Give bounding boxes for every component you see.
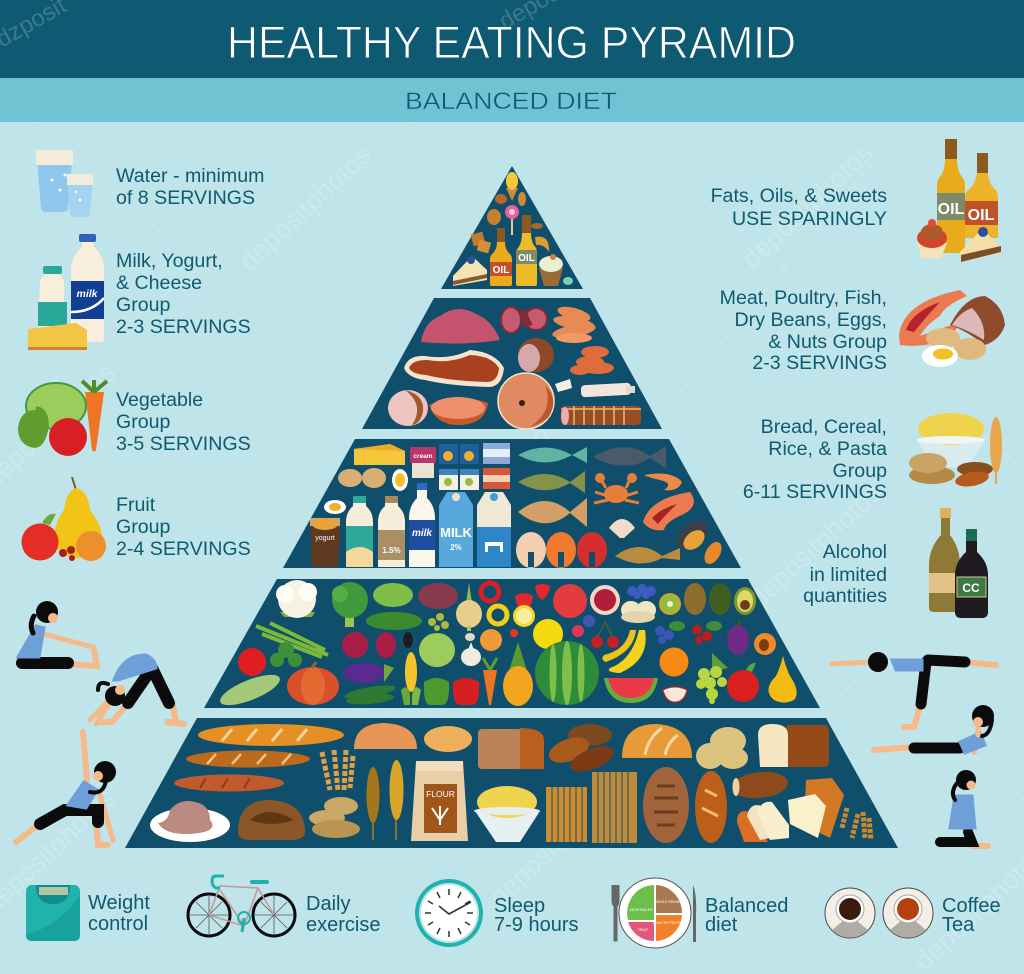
icon: milk bottle, yogurt and cheese: milk: [76, 288, 99, 300]
scallop shell: [609, 519, 635, 538]
flour bag: [411, 761, 468, 841]
pyramid tier 1: fats, oils and sweets: [441, 166, 583, 289]
yellow pear: [768, 656, 797, 702]
text: water: Water - minimum: [116, 165, 264, 187]
raspberry: [572, 625, 584, 637]
oil bottle right: OIL: [518, 253, 535, 264]
bun left: [354, 723, 417, 749]
text: bread group: Group: [833, 460, 887, 482]
bottle: 1.5 percent: [378, 496, 405, 567]
yoga figure: seated forward stretch: [18, 601, 97, 666]
short spaghetti bundle: [546, 787, 587, 842]
watermelon: [535, 641, 599, 705]
text: fats: USE SPARINGLY: [732, 208, 887, 230]
ice cream cone: [506, 172, 518, 201]
green fish: [518, 471, 585, 493]
milk group: text and icon: [28, 234, 251, 350]
text: alcohol: Alcohol: [823, 541, 887, 563]
label: sleep: 7-9 hours: [494, 914, 578, 936]
tan fish: [518, 498, 587, 527]
cucumber zucchini: [217, 669, 283, 711]
icon: wine and liqueur bottles: [929, 508, 988, 618]
text: milk group: & Cheese: [116, 272, 202, 294]
bottle: 1.5 percent: 1.5%: [382, 546, 401, 555]
apple slice: [663, 687, 687, 702]
red bell pepper: [453, 678, 479, 705]
icon: glasses of water: [36, 150, 93, 217]
text: bread group: Bread, Cereal,: [761, 416, 887, 438]
croissant: [535, 237, 549, 252]
text: meat group: 2-3 SERVINGS: [752, 352, 887, 374]
beef steak: [404, 350, 504, 387]
icon: salmon, meat, eggs: [899, 290, 1005, 367]
icon: plate with food groups: WHOLE GRAINS: [654, 900, 682, 904]
plum: [727, 620, 749, 655]
flat fish: [615, 547, 680, 564]
text: bread group: Rice, & Pasta: [768, 438, 887, 460]
golden long bread: [695, 771, 727, 843]
bun right: [424, 726, 472, 752]
icon: milk bottle, yogurt and cheese: [28, 234, 104, 350]
text: depositphotos: [736, 138, 879, 274]
icon: cabbage, pepper, tomato, carrot: [18, 380, 107, 456]
label: daily exercise: Daily: [306, 893, 350, 915]
cream pot: [410, 447, 436, 478]
label: weight control: Weight: [88, 892, 150, 914]
candy: [563, 277, 573, 285]
icon: wine and liqueur bottles: CC: [962, 581, 980, 595]
avocado: [709, 583, 731, 615]
small brown loaf: [731, 769, 789, 801]
dark olive: [403, 632, 413, 648]
bottom item: coffee and tea: [825, 888, 1001, 938]
bottom item: sleep: [415, 879, 578, 947]
orange sausages: [551, 304, 597, 343]
chocolate yogurt cup: [310, 518, 340, 567]
teal fish: [518, 447, 587, 463]
bowl of mash: [474, 786, 540, 842]
salami: [501, 307, 547, 333]
red cabbage leaves: [418, 583, 458, 609]
tier 2 background: [362, 298, 662, 429]
text: milk group: Milk, Yogurt,: [116, 250, 223, 272]
label: daily exercise: exercise: [306, 914, 380, 936]
chocolate yogurt cup: yogurt: [315, 535, 335, 542]
bread slices: [737, 802, 789, 842]
butter packs: [483, 443, 510, 489]
crackers: [471, 232, 491, 253]
text: water: of 8 SERVINGS: [116, 187, 255, 209]
plate of ham: [150, 801, 230, 842]
grapes: [696, 653, 728, 704]
oil bottle right: [516, 215, 537, 286]
white sausage: [581, 383, 635, 397]
onion: [456, 583, 482, 631]
text: depositphotos: [492, 346, 635, 482]
tied roast: [561, 406, 641, 425]
icon: plate with food groups: [619, 878, 691, 948]
beetroots: [342, 632, 396, 658]
yoga figure: lunge with raised arm: [16, 732, 116, 845]
red apple: [727, 663, 759, 702]
tier 4 background: [204, 579, 820, 708]
fats group: text and icon: [711, 139, 1001, 262]
bacon joint: [388, 390, 428, 426]
text: bread group: 6-11 SERVINGS: [743, 481, 887, 503]
rye loaf: [238, 800, 305, 840]
red pepper rings: [481, 583, 499, 601]
lettuce: [373, 583, 413, 607]
flour bag: FLOUR: [426, 789, 455, 799]
icon: pear, apple, orange, currants: [22, 477, 106, 561]
shrimp: [644, 474, 682, 490]
blue milk carton: 2%: [450, 543, 462, 552]
text: fruit group: 2-4 SERVINGS: [116, 538, 251, 560]
cake slice: [453, 256, 487, 286]
text: milk group: 2-3 SERVINGS: [116, 316, 251, 338]
wheat ears: [366, 760, 404, 840]
icon: oil bottles and sweets: OIL: [938, 201, 965, 218]
long spaghetti bundle: [592, 772, 637, 843]
mushrooms: [621, 601, 656, 623]
icon: mash bowl, biscuits, wheat: [909, 413, 1002, 489]
cauliflower: [276, 580, 317, 618]
text: depositphotos: [484, 776, 627, 912]
text: vegetable group: 3-5 SERVINGS: [116, 433, 251, 455]
apricot: [480, 629, 502, 651]
icon: weighing scale: [26, 885, 80, 941]
header band: [0, 0, 1024, 122]
text: alcohol: in limited: [810, 564, 887, 586]
kiwi half: [659, 593, 681, 615]
icon: plate with food groups: VEGETABLES: [630, 908, 653, 912]
white loaf: [788, 778, 844, 838]
cherries: [591, 622, 619, 648]
bottle: milk: [409, 483, 435, 567]
corn: [401, 652, 421, 705]
kiwi: [684, 583, 706, 615]
ham slice: [429, 397, 488, 425]
small pastries: [487, 192, 543, 229]
mussel meat: [701, 539, 725, 567]
meat group: text and icon: [720, 287, 1005, 374]
yogurt cups: [439, 444, 479, 490]
bottom item: daily exercise: [188, 876, 380, 936]
brown bread: [478, 728, 544, 769]
icon: fork: [612, 885, 619, 941]
blue milk carton: MILK: [440, 525, 472, 540]
text: meat group: Dry Beans, Eggs,: [735, 309, 887, 331]
fruit group: text and icon: [22, 477, 251, 561]
label: sleep: Sleep: [494, 895, 545, 917]
apricot half: [754, 633, 776, 655]
red berry: [510, 629, 518, 637]
icon: coffee cup: [825, 888, 875, 938]
raw pink meat: [421, 309, 500, 344]
round loaf: [622, 724, 692, 758]
title: HEALTHY EATING PYRAMID: [227, 17, 796, 68]
pomegranate half: [590, 585, 620, 615]
pyramid tier 4: vegetables and fruit: [204, 579, 820, 711]
label: coffee tea: Coffee: [942, 895, 1001, 917]
oil bottle left: OIL: [493, 265, 509, 276]
subtitle: BALANCED DIET: [405, 88, 617, 115]
dark fish: [593, 446, 666, 468]
pyramid tier 3: dairy and fish: [283, 439, 741, 568]
bananas: [602, 630, 646, 673]
yoga figure: standing balance: [832, 652, 996, 727]
icon: oil bottles and sweets: [917, 139, 1001, 262]
blueberries: [627, 584, 656, 599]
zucchinis: [344, 683, 396, 706]
text: fruit group: Fruit: [116, 494, 156, 516]
garlic: [461, 633, 481, 666]
tier 1 background: [441, 166, 583, 289]
text: fats: Fats, Oils, & Sweets: [711, 185, 887, 207]
icon: plate with food groups: HEALTHY PROTEIN: [653, 921, 686, 925]
brown rolls: [546, 724, 617, 777]
lemon slice: [513, 605, 535, 627]
icon: oil bottles and sweets: OIL: [968, 207, 995, 224]
cucumber: [366, 612, 422, 630]
bottle: milk: milk: [412, 528, 432, 539]
avocado half: [734, 587, 756, 615]
vegetable group: text and icon: [18, 380, 251, 456]
bottom item: weight control: [26, 885, 150, 941]
lollipop: [505, 205, 519, 235]
bread group: text and icon: [743, 413, 1002, 503]
green cabbage: [419, 633, 455, 667]
olives: [428, 613, 449, 631]
biscuit stack: [309, 797, 360, 838]
potatoes: [696, 727, 748, 769]
label: balanced diet: diet: [705, 914, 738, 936]
icon: clock: [415, 879, 483, 947]
baguette lower: [174, 774, 284, 792]
alcohol group: text and icon: [803, 508, 988, 618]
eggplant: [343, 663, 394, 683]
text: milk group: Group: [116, 294, 171, 316]
dark blueberry: [583, 615, 595, 627]
cupcake: [539, 254, 563, 286]
label: balanced diet: Balanced: [705, 895, 788, 917]
fusilli bundle: [322, 750, 353, 791]
yoga figure: cobra pose: [874, 705, 994, 753]
green onion: [256, 623, 328, 657]
yellow pepper rings: [489, 606, 507, 624]
water group: text and icon: [36, 150, 264, 217]
pyramid tier 5: bread and grains: [125, 718, 898, 848]
bottle: teal yogurt: [346, 496, 373, 567]
text: alcohol: quantities: [803, 585, 887, 607]
text: vegetable group: Group: [116, 411, 171, 433]
cow milk carton: [477, 492, 511, 567]
crab: [594, 473, 639, 503]
lemon: [533, 619, 563, 649]
sliced white bread: [758, 724, 829, 767]
cheese: [354, 444, 405, 465]
text: meat group: & Nuts Group: [768, 331, 887, 353]
strawberries: [515, 584, 550, 612]
label: coffee tea: Tea: [942, 914, 975, 936]
green bell pepper: [424, 678, 449, 705]
currants: [692, 621, 722, 644]
tomato: [238, 648, 266, 676]
eggs: [324, 468, 408, 514]
blueberries with leaves: [655, 621, 685, 644]
parsley: [270, 642, 302, 667]
bottom item: balanced diet: [612, 878, 788, 948]
pumpkin: [287, 662, 339, 705]
salmon steak: [643, 492, 694, 530]
yoga figure: seated kneeling: [940, 770, 988, 846]
smoked ham: [518, 338, 554, 372]
text: depositphotos: [234, 140, 377, 276]
orange: [660, 648, 688, 676]
pyramid tier 2: meat: [362, 298, 662, 429]
blue milk carton: [439, 492, 473, 567]
cream pot: cream: [413, 453, 433, 460]
tier 5 background: [125, 718, 898, 848]
baguette middle: [186, 750, 310, 768]
text: fruit group: Group: [116, 516, 171, 538]
text: meat group: Meat, Poultry, Fish,: [720, 287, 887, 309]
icon: bicycle: [188, 876, 295, 936]
pineapple: [503, 642, 533, 706]
text: vegetable group: Vegetable: [116, 389, 203, 411]
fish steaks: [516, 532, 607, 568]
icon: tea cup: [883, 888, 933, 938]
long rye bread: [643, 767, 689, 843]
icon: knife: [693, 885, 696, 942]
carrot: [483, 658, 497, 705]
baguette top: [198, 724, 344, 746]
oil bottle left: [490, 228, 512, 286]
small fusilli: [842, 808, 871, 840]
ham leg: [498, 373, 572, 429]
icon: plate with food groups: FRUIT: [638, 928, 649, 932]
small sausages: [570, 346, 614, 375]
broccoli: [332, 582, 368, 627]
pomegranate: [553, 584, 587, 618]
text: depositphotos: [744, 478, 887, 614]
label: weight control: control: [88, 913, 148, 935]
yoga figure: downward dog: [90, 655, 184, 724]
tier 3 background: [283, 439, 741, 568]
watermelon slice: [604, 678, 658, 703]
mussel: [671, 515, 713, 555]
